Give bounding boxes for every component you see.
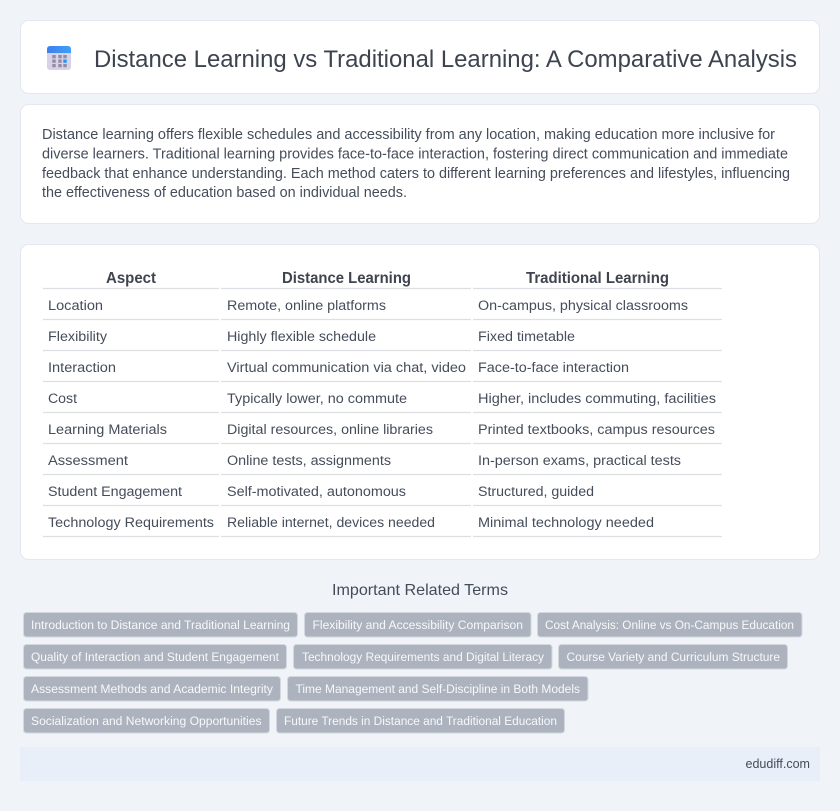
tag xyxy=(24,612,298,637)
table header row: Aspect xyxy=(106,270,157,287)
row: cost xyxy=(48,391,716,407)
tag: Course Variety and Curriculum Structure xyxy=(566,650,780,664)
row: assessment: Online tests, assignments xyxy=(227,453,391,469)
header panel xyxy=(20,20,820,94)
tag: Flexibility and Accessibility Comparison xyxy=(312,618,523,632)
tag xyxy=(558,644,788,669)
panel: introduction text: diverse learners. Traditional learning provides face-to-face interaction, fostering direct communication and immediate xyxy=(42,146,788,162)
tag xyxy=(24,644,286,669)
row: learning materials: Learning Materials xyxy=(48,422,167,438)
footer xyxy=(20,747,820,781)
row: cost: Cost xyxy=(48,391,77,407)
tag xyxy=(304,612,531,637)
footer: edudiff.com xyxy=(746,757,810,771)
row: interaction xyxy=(48,360,629,376)
tag xyxy=(538,612,802,637)
row: location: Location xyxy=(48,298,103,314)
row: technology requirements xyxy=(48,515,654,531)
tag list: related terms xyxy=(24,612,802,733)
tag: Introduction to Distance and Traditional Learning xyxy=(31,618,290,632)
row: cost: Higher, includes commuting, facilities xyxy=(478,391,716,407)
row: student engagement: Student Engagement xyxy=(48,484,182,500)
tag: Cost Analysis: Online vs On-Campus Education xyxy=(545,618,794,632)
row: student engagement: Self-motivated, autonomous xyxy=(227,484,406,500)
row: location: Remote, online platforms xyxy=(227,298,386,314)
row: assessment xyxy=(48,453,681,469)
table header row: Traditional Learning xyxy=(526,270,669,287)
table header row xyxy=(106,270,669,287)
tag: Time Management and Self-Discipline in Both Models xyxy=(296,682,580,696)
icon: calendar xyxy=(47,46,71,70)
tag xyxy=(288,676,588,701)
tag xyxy=(276,708,564,733)
row: flexibility xyxy=(48,329,575,345)
row: interaction: Face-to-face interaction xyxy=(478,360,629,376)
title: Distance Learning vs Traditional Learning: A Comparative Analysis xyxy=(94,46,797,73)
table header row: Distance Learning xyxy=(282,270,411,287)
tag: Quality of Interaction and Student Engagement xyxy=(31,650,280,664)
row: flexibility: Flexibility xyxy=(48,329,108,345)
row: technology requirements: Technology Requirements xyxy=(48,515,214,531)
row: student engagement xyxy=(48,484,594,500)
panel: introduction text: feedback that enhance understanding. Each method caters to different learning preferences and lifestyles, influencing xyxy=(42,166,790,182)
row: location: On-campus, physical classrooms xyxy=(478,298,688,314)
panel: comparison table xyxy=(20,244,820,560)
row: learning materials xyxy=(48,422,715,438)
panel: introduction text xyxy=(20,104,820,224)
row: student engagement: Structured, guided xyxy=(478,484,594,500)
tag: Future Trends in Distance and Traditional Education xyxy=(284,714,557,728)
row: learning materials: Digital resources, online libraries xyxy=(227,422,433,438)
row: assessment: In-person exams, practical tests xyxy=(478,453,681,469)
row: location xyxy=(48,298,688,314)
row: flexibility: Highly flexible schedule xyxy=(227,329,376,345)
tag: Technology Requirements and Digital Literacy xyxy=(302,650,545,664)
row: cost: Typically lower, no commute xyxy=(227,391,407,407)
row: learning materials: Printed textbooks, campus resources xyxy=(478,422,715,438)
row: technology requirements: Reliable internet, devices needed xyxy=(227,515,435,531)
heading: important related terms: Important Related Terms xyxy=(332,582,508,599)
tag xyxy=(24,676,280,701)
tag: Socialization and Networking Opportunities xyxy=(31,714,262,728)
tag: Assessment Methods and Academic Integrity xyxy=(31,682,274,696)
row: interaction: Virtual communication via chat, video xyxy=(227,360,466,376)
panel: introduction text: the effectiveness of education based on individual needs. xyxy=(42,185,407,201)
tag xyxy=(24,708,270,733)
panel: introduction text: Distance learning offers flexible schedules and accessibility from any location, making education more inclusive for xyxy=(42,127,775,143)
row: assessment: Assessment xyxy=(48,453,128,469)
tag xyxy=(294,644,552,669)
row: technology requirements: Minimal technology needed xyxy=(478,515,654,531)
row: flexibility: Fixed timetable xyxy=(478,329,575,345)
row: interaction: Interaction xyxy=(48,360,116,376)
